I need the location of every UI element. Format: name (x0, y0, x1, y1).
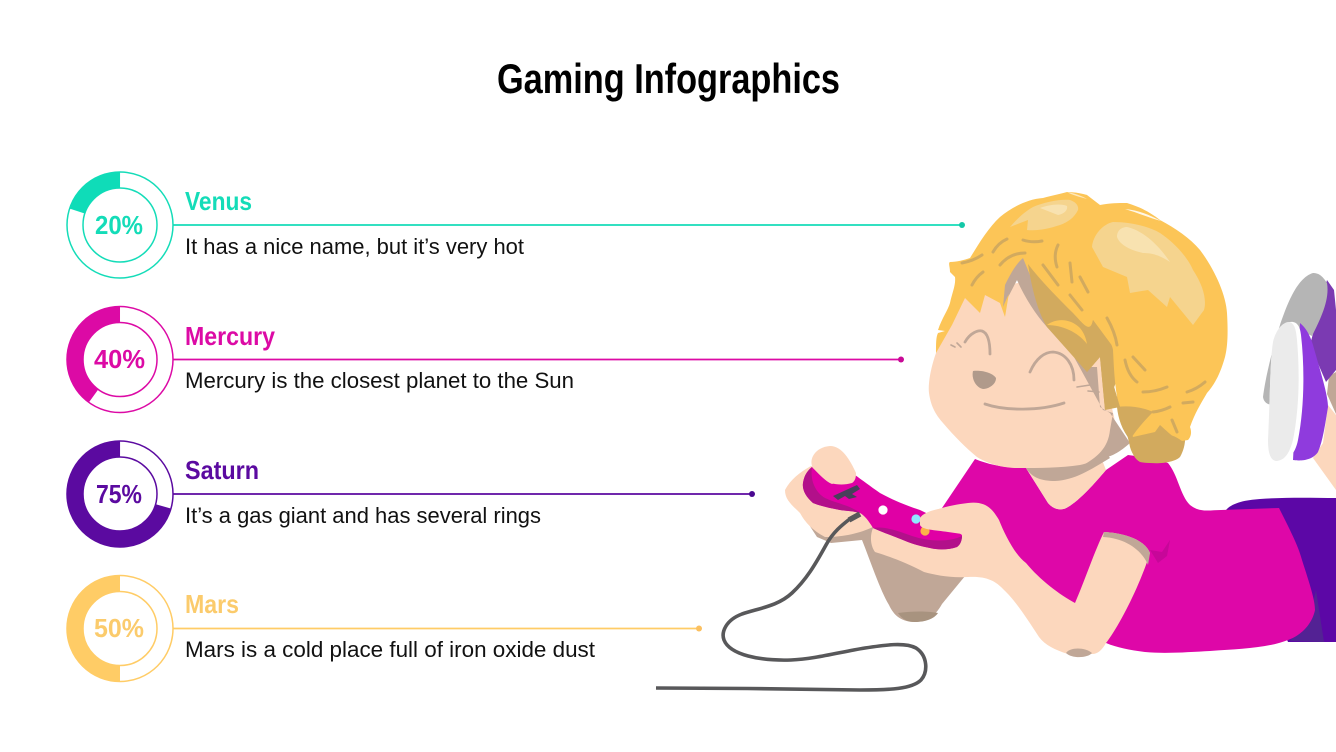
panel: Venus row (63, 168, 965, 282)
icon: feet and shoes (1263, 273, 1336, 490)
icon: controller cable (656, 514, 926, 690)
percentage: 50%: 50% (94, 613, 144, 643)
donut chart: Venus 20% (63, 168, 177, 282)
title: Gaming Infographics (497, 55, 840, 102)
connector line: Venus (173, 222, 965, 228)
heading: Mars: Mars (185, 589, 239, 619)
icon: game controller (803, 446, 975, 549)
heading: Venus: Venus (185, 186, 252, 216)
icon: arm and right hand (871, 503, 1150, 657)
icon: hair (936, 192, 1228, 463)
illustration: child playing video game (656, 192, 1336, 690)
icon: left forearm shadow (804, 517, 970, 622)
heading: Mercury: Mercury (185, 321, 275, 351)
connector line: Mercury (173, 356, 904, 362)
description: Saturn: It’s a gas giant and has several rings (185, 503, 541, 528)
icon: left hand (785, 466, 873, 537)
icon: neck (1020, 445, 1110, 509)
icon: sleeve fold (1150, 540, 1170, 563)
heading: Saturn: Saturn (185, 455, 259, 485)
panel: Mars row (67, 576, 702, 682)
percentage: 75%: 75% (96, 479, 142, 509)
donut chart: Mercury 40% (57, 297, 183, 422)
icon: nose (973, 371, 996, 389)
connector line: Saturn (173, 491, 755, 497)
icon: fingers (920, 507, 975, 534)
panel: Mercury row (57, 297, 904, 422)
panel: Saturn row (64, 438, 755, 550)
description: Venus: It has a nice name, but it’s very hot (185, 234, 524, 259)
percentage: 40%: 40% (94, 344, 145, 374)
donut chart: Saturn 75% (64, 438, 176, 550)
connector line: Mars (173, 626, 702, 632)
icon: face (929, 262, 1130, 468)
icon: trousers (1226, 498, 1336, 642)
icon: pink shirt (942, 455, 1315, 653)
description: Mercury: Mercury is the closest planet to the Sun (185, 368, 574, 393)
hair strands (962, 239, 1205, 443)
icon: thumb (811, 446, 856, 484)
icon: closed eyes (951, 331, 1099, 392)
donut chart: Mars 50% (67, 576, 173, 682)
icon: smile (985, 403, 1064, 409)
percentage: 20%: 20% (95, 210, 143, 240)
description: Mars: Mars is a cold place full of iron oxide dust (185, 637, 595, 662)
